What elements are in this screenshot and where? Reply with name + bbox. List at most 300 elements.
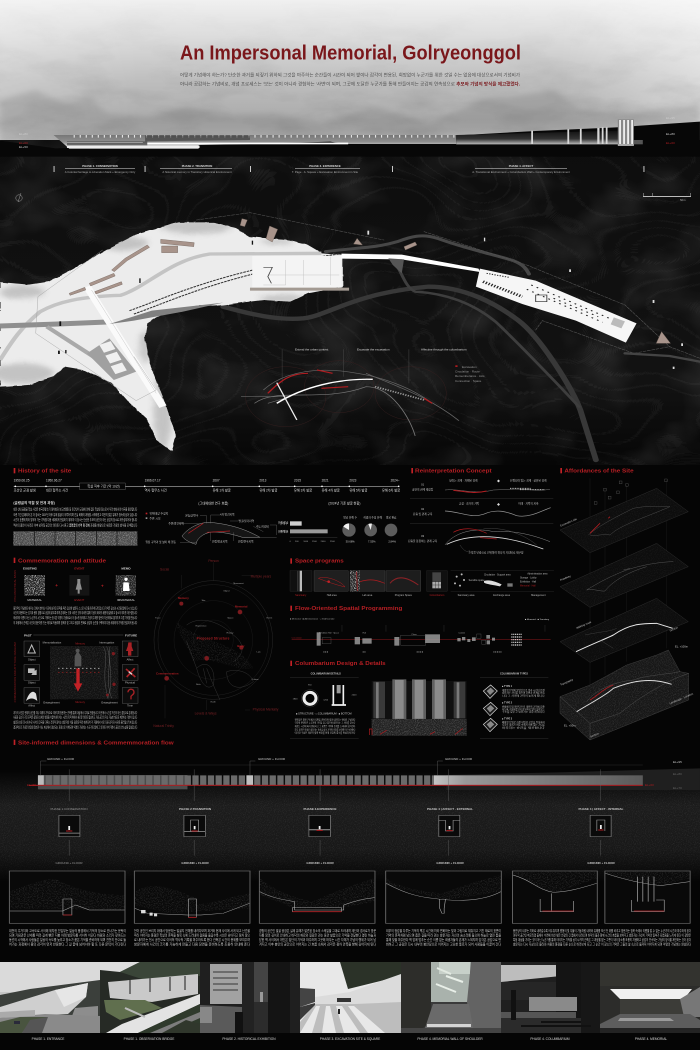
flow strip: ■ ■ ■	[323, 650, 329, 653]
flow strip: ■ Memorial · ■ Administration · □ Void/Corridor	[290, 618, 335, 621]
radial memory diagram: Social	[160, 567, 169, 571]
section labels: PHASE 4 | AFFECT - INTERNAL	[579, 807, 624, 811]
phase descriptions	[9, 928, 692, 946]
phase labels: A Colonial heritage to Liberation Mark + Emergency Only	[65, 170, 136, 174]
longitudinal section building in terrain	[0, 119, 700, 157]
columbarium details: 1200	[323, 700, 329, 702]
phase descriptions: 대전의 주거지와 고속도로 사이에 위치한 진입부는 일상의 풍경에서 기억의 장소로 건너가는 문턱이	[9, 928, 126, 933]
existing / event / memo: EVENT	[74, 598, 84, 602]
radial memory diagram: Person	[208, 559, 219, 563]
flow strip: Column	[458, 633, 465, 635]
radial memory diagram: Multiple years	[251, 574, 272, 578]
axonometric layers	[559, 478, 694, 740]
concept diagrams: 고정 · 과거의 기억	[459, 502, 480, 506]
excavation stats chart	[280, 500, 397, 543]
section labels: EL+60	[27, 783, 36, 787]
radial memory diagram: Memory	[178, 596, 189, 600]
photo captions: PHASE 4. MEMORIAL WALL OF SHOULDER	[417, 1037, 483, 1041]
heading: history: History of the site	[18, 469, 71, 475]
timeline: 2013	[259, 478, 267, 482]
heading: flow-oriented: Flow-Oriented Spatial Programming	[295, 606, 403, 612]
phase labels: A historical memory in Transitory Historical Environment	[162, 170, 232, 174]
timeline: 유해 1차 발굴	[213, 488, 231, 493]
program thumbnails: Administration area	[527, 572, 548, 575]
existing / event / memo: EXISTING	[23, 567, 38, 571]
radial memory diagram: Space	[227, 617, 234, 619]
intro text: 아니라 공감하는 기념비로, 개념 프로세스는 '보는' 것이 아니라 경험하는 '사변'이 되며, 그곳에 도달한 누군가를 통해 만들어지는 공감의 연속성으로 추모와 기념의 방식을 제고했었다.	[180, 80, 520, 88]
concept diagrams: 01	[421, 483, 425, 487]
side label: PHILOSOPHICAL BASIS	[13, 570, 17, 602]
past future diagram: Object	[28, 681, 36, 685]
past future diagram: FUTURE	[125, 633, 137, 637]
site timeline diagram: 발굴/불가지역	[239, 519, 255, 523]
program thumbnails	[290, 571, 554, 597]
dashed paths to memorial	[129, 254, 341, 314]
heading: affordances: Affordances of the Site	[564, 469, 634, 475]
phase descriptions: 통해 빛을 마주한다 벽 앞에 멈추는 순간 이름 없는 희생자들의 존재가 느껴지며 감각은 공감으로 변	[386, 937, 501, 942]
concept diagrams: 공간의 관계 재정립	[412, 487, 434, 491]
wedge to building	[109, 303, 223, 324]
program thumbnails: Columbarium	[430, 594, 444, 597]
timeline: 대전 형무소 사건	[46, 488, 68, 493]
dark roads	[196, 213, 700, 460]
existing / event / memo: MEMO	[121, 567, 131, 571]
concept diagrams: 보이는 경계 · 차폐된 경계	[449, 479, 478, 483]
phase descriptions: 겨지고 이후 봉안의 공간으로 이어지는 긴 흐름 속에서 감각은 점차 안쪽을 향해 깊어지게 된다	[259, 942, 377, 946]
axonometric layers: Roadway	[559, 574, 572, 582]
photo captions: PHASE 2. HISTORICAL EXHIBITION	[222, 1037, 276, 1041]
long section and phase boxes	[9, 761, 700, 923]
concept diagrams: 미래 · 기억의 지속	[518, 502, 539, 506]
diagram captions: Rememberance · Axis	[455, 374, 485, 378]
diagram captions: Extend the urban context	[295, 348, 329, 352]
section labels: GROUND + FLOOR	[436, 861, 464, 865]
radial memory diagram: Object	[223, 590, 230, 593]
columbarium details: 각각의 봉안단은 누군가의 기억을 담고 있으며 방문자는 그 사이를 걷는다	[295, 721, 355, 725]
site timeline diagram: (그대에대한 연구 흐름)	[198, 501, 228, 506]
program thumbnails: Sanctuary	[295, 594, 307, 597]
flow section: grain ground	[0, 778, 700, 876]
radial memory diagram: Memorial	[235, 604, 248, 608]
excavation stats chart: (2024년 기준 발굴 현황)	[328, 500, 360, 505]
columbarium details: 하도록 구성하였으며 상부에서 빛이 들어오는	[502, 707, 545, 711]
photo captions: PHASE 1. OBSERVATION BRIDGE	[124, 1037, 174, 1041]
radial memory diagram: Trace	[155, 616, 161, 619]
program thumbnails: Lab area	[362, 594, 373, 597]
timeline	[14, 478, 290, 493]
timeline: 조선인 군경 발생	[14, 488, 36, 493]
flow strip: Plaza	[412, 634, 418, 636]
flow strip: ■ ■	[363, 650, 366, 653]
attitude text: 사건의 재현보다는 감각과 몸의 경험으로 공감에 닿도록 하며 존재하는 것과 사라진 것의 대비를 통해 기념의 태도를 새롭게 설정하고 장소의 의미를 재구성합니다	[13, 610, 137, 615]
columbarium details: 개방형 단위의 봉안단으로 빛과 시선이 연결	[502, 688, 545, 692]
columbarium details: ■ TYPE 3	[502, 717, 513, 720]
radial memory diagram: Levels & Ways	[195, 711, 217, 715]
columbarium details	[290, 673, 548, 739]
heading: site-informed: Site-informed dimensions & Commemmoration flow	[18, 740, 174, 746]
parking area	[87, 338, 136, 380]
phase descriptions: 자를 땅의 깊이로 안내하고 바닥의 재료와 질감은 걷는 동안 발끝으로 기억을 전달한다 열린 하늘과	[259, 932, 376, 938]
columbarium details: 구조를 갖추고 방문자는 멈추게 됩니다	[502, 710, 546, 714]
elevation labels: EL+80	[19, 132, 28, 136]
photo: memorial wall of shoulder	[401, 962, 501, 1033]
bridge strip	[341, 254, 480, 272]
columbarium details: 방문자는 사이를 걸으며 주변과 관계를 만듭	[502, 691, 546, 695]
site plan	[0, 213, 700, 460]
phase descriptions: 닫힌 벽 사이에서 개인은 집단의 기억과 마주하며 그곳에 머무는 시간 자체가 기념의 행위가 되어 남	[259, 937, 376, 942]
program thumbnails: Circulation · Support area	[484, 574, 511, 577]
photo captions: PHASE 4. MEMORIAL	[635, 1037, 667, 1041]
site timeline diagram: 4차 발견지역	[220, 513, 235, 517]
timeline: 1950.06.27	[46, 478, 62, 482]
columbarium details: 이러한 구성은 재료와 빛의 변화를 통해 공감의 장소를 형성하게 된다	[295, 731, 355, 735]
photo captions: PHASE 3. EXCAVATION SITE & SQUARE	[320, 1037, 380, 1041]
past future diagram: Memory	[75, 700, 86, 704]
phase descriptions: 로 내려가는 전시 공간으로 이어져 역사적 기록을 마주하도록 한다 건축은 시간의 층위를 보여주며	[134, 937, 250, 942]
radial memory diagram: History	[227, 631, 234, 634]
excavation stats chart: 희생자 추정 유해	[363, 515, 382, 519]
radial memory diagram: Earth	[211, 700, 217, 703]
past future diagram: Physical	[125, 681, 135, 685]
program thumbnails: Exchange area	[493, 594, 511, 597]
existing / event / memo	[23, 567, 136, 602]
axonometric layers: Landscape · Location	[669, 691, 694, 705]
phase descriptions: 어가는 과정에서 몸의 감각이 먼저 반응한다 그 길 끝에 넘어서야 할 또 다른 문턱이 기다린다	[9, 942, 127, 946]
columbarium details: 하부 공간은 아래로 내려가는 동선을 따라 기억의 층위를 순차적으로 보여준다	[295, 727, 355, 731]
past future diagram: Entanglement	[101, 701, 118, 705]
diagram text: 발굴과 보존 전시와 추모 사이의 간극을 다루는 건축적 장치는 방문자의 이동 경로를 따라 배치되어 각 지점에서 서로 다른 감각과 사유를 불러일으키게 됩니다	[13, 719, 137, 724]
site timeline diagram: 유해 발굴	[278, 521, 289, 525]
phase labels	[54, 164, 644, 174]
diagram captions: Excavation	[462, 365, 477, 369]
concept diagrams: ◆	[497, 502, 500, 506]
past future diagram: Memorialization	[43, 641, 62, 645]
section labels: GROUND + FLOOR	[587, 861, 615, 865]
photo: observation bridge	[100, 962, 200, 1033]
photo captions: PHASE 1. ENTRANCE	[32, 1037, 64, 1041]
phase labels: PHASE 4. AFFECT	[509, 164, 534, 168]
site sections	[9, 871, 690, 923]
program thumbnails: Program Space	[395, 594, 413, 597]
columbarium details: 반폐쇄 단위 봉안단으로 개인의 기억에 집중	[502, 704, 546, 708]
history text: 역사의 증인이 사라진 이후 남겨질 공간의 의미를 다시 묻고 골령골의 기억 및 전개 과정을 바탕으로 새로운 기념의 방식을 모색합니다	[13, 522, 137, 527]
past future diagram: Entanglement	[43, 701, 60, 705]
radial memory diagram: Natural Trinity	[153, 724, 174, 728]
columbarium details: 마주하는 순간을 제공합니다	[502, 725, 546, 729]
columbarium details: ■ STRUCTURE · □ COLUMBARIUM · ■ BOTTOM	[296, 712, 352, 715]
radial memory diagram: Relic	[196, 684, 202, 686]
phase labels: PHASE 1. CONSERVATION	[82, 164, 118, 168]
site timeline diagram: 유해 발굴	[278, 530, 289, 534]
past future diagram: COMMEMORATION AND ATTITUDE DIAGRAM	[13, 642, 17, 702]
history text: (골령골의 역할 및 전개 과정)	[13, 500, 55, 505]
flow strip: Exhibition Hall · Space	[319, 632, 340, 635]
elevation labels: EL+95	[666, 116, 675, 120]
intro text	[180, 72, 520, 88]
radial memory diagram: Body	[237, 644, 245, 648]
concept diagrams: 단절되어 있는 경계 · 공유된 경계	[510, 479, 547, 483]
existing / event / memo: IMMATERIAL	[117, 598, 135, 602]
columbarium details: 2400	[352, 695, 357, 697]
existing / event / memo: +	[101, 584, 104, 589]
program thumbnails: Exhibition · Hall	[520, 580, 537, 583]
phase descriptions: 방문자에게 사건의 크기를 가늠하게 만들고 다음 장면을 준비하도록 조용히 안내해 준다	[134, 942, 251, 946]
timeline: 역사 형무소 사건	[145, 488, 167, 493]
columbarium details: 950	[308, 685, 312, 687]
radial memory diagram: Law	[257, 651, 261, 653]
columbarium wedge	[476, 269, 637, 343]
concept diagrams: 단층 및 관계 구축	[413, 512, 433, 516]
elevation labels: EL+60	[666, 141, 675, 145]
site timeline diagram: 유해매장 추정지	[149, 512, 169, 516]
section labels: PHASE 2.TRANSITION	[179, 807, 211, 811]
history text	[13, 500, 137, 527]
timeline continued: 유해 5차 발굴	[349, 488, 367, 493]
columbarium details: 봉안당은 원형 구조체가 지면을 관통하여 빛이 내려오는 형태로 구성된다	[295, 717, 355, 721]
columbarium details: 재료는 시간에 따라 변화하고 그 표면은 기억의 층위를 드러내며 남겨진다	[295, 724, 355, 728]
timeline continued: 2024~	[391, 478, 400, 482]
photo: entrance	[0, 962, 100, 1033]
phase labels: T. Page · A. Square + Excavation Environment in Site	[292, 170, 359, 174]
timeline continued: 유해 3차 발굴	[294, 488, 312, 493]
brown pavilions	[69, 219, 670, 343]
flow strip: ■ ■ ■ ■ ■	[493, 650, 502, 653]
phase labels: PHASE 3. EXPERIENCE	[309, 164, 341, 168]
site timeline diagram: 인접/연구지역	[238, 539, 254, 543]
diagram text: 결과적으로 기념은 완결된 형태가 아닌 계속해서 갱신되는 과정으로 이해되며 익명의 기념비는 누군가를 통해 그 의미를 이어가면서 공감의 연속성을 형성합니다	[13, 725, 137, 730]
excavation stats chart: 2.84%	[388, 539, 397, 543]
radial memory diagram: Culture	[252, 678, 259, 681]
site timeline diagram	[145, 501, 289, 544]
memorial court	[250, 256, 349, 291]
section labels: EL+80	[673, 772, 682, 776]
diagram text: 과거의 사건은 현재의 공간을 지나 미래의 기억으로 이어지며 방문자는 건축을 통해 대상에서 주체로 전환됩니다 이곳에서 시간은 직선이 아닌 겹침으로 존재합니다	[13, 710, 137, 715]
columbarium details: 1800	[293, 698, 298, 700]
timeline continued: 유해 4차 발굴	[322, 488, 340, 493]
excavation stats chart: 1000	[303, 541, 309, 543]
small section frames	[59, 815, 611, 837]
section labels: EL+70	[673, 786, 682, 790]
phase labels: PHASE 2. TRANSITION	[182, 164, 212, 168]
existing / event / memo: MATERIAL	[27, 598, 42, 602]
timeline continued: 2021	[322, 478, 329, 482]
concept diagrams: 03	[421, 534, 425, 538]
heading: reinterpretation: Reinterpretation Concept	[415, 469, 492, 475]
radial memory diagram: Monument	[233, 582, 244, 585]
radial memory diagram: Proposed Structure	[197, 636, 230, 640]
scale bar	[643, 193, 691, 202]
diagram captions: Connection · Space	[455, 379, 482, 383]
heading: commemoration: Commemoration and attitude	[18, 558, 106, 564]
site timeline diagram: 운동장/연구	[185, 513, 199, 517]
excavation stats chart: 2500	[330, 541, 336, 543]
scale bar: 50m	[680, 198, 686, 202]
concept diagrams: ◆	[497, 479, 500, 483]
program thumbnails: Sensible space	[469, 580, 485, 582]
existing / event / memo: EVENT	[74, 567, 84, 571]
flow strip: ■ ■ ■ ■	[417, 650, 424, 653]
photo: columbarium	[501, 962, 600, 1033]
past future diagram: Affect	[28, 703, 35, 707]
axonometric layers: Section	[669, 625, 679, 633]
radial memory diagram	[153, 559, 279, 728]
past future diagram: PAST	[24, 633, 32, 637]
section labels: GROUND + FLOOR	[445, 757, 473, 761]
section labels: GROUND + FLOOR	[306, 861, 334, 865]
flow strip: ■ Memorial · ■ Transitory	[525, 618, 550, 621]
site timeline diagram: 주변/발견지역	[168, 521, 184, 525]
axonometric layers: Walking route	[575, 620, 592, 630]
attitude text: 물리적인 기념비를 세우는 것에서 벗어나 이곳에 남겨진 흔적을 따라 걸으며 방문자 스스로 사건을 마주하도록 합니다 기억은 장소와 시간을 통해 다시 쓰입니다	[13, 605, 137, 610]
site timeline diagram: 추도/기념비	[256, 524, 270, 528]
panel: left column	[13, 468, 290, 746]
phase descriptions: 경험의 공간인 발굴 광장은 실제 유해가 발견된 장소의 스케일을 그대로 드러내며 계단과 경사로가 방문	[259, 928, 376, 933]
elevation labels: EL+60	[19, 141, 28, 145]
program thumbnails: Sanctuary area	[458, 594, 475, 597]
radial memory diagram: Experience	[196, 625, 207, 628]
site timeline diagram: 인접/발굴지역	[212, 539, 228, 543]
timeline: 1950.06.25	[14, 478, 30, 482]
diagram: site organisation	[241, 349, 459, 436]
radial memory diagram: Physical Mentally	[253, 708, 279, 712]
radial memory diagram: Event	[267, 616, 273, 619]
radial memory diagram: Site	[202, 599, 206, 602]
timeline continued: 유해 6차 발굴	[382, 488, 400, 493]
diagram captions: Affective through the columbarium	[421, 348, 467, 352]
excavation stats chart: 유해 수	[280, 521, 289, 525]
attitude text	[13, 605, 137, 625]
section labels: EL+95	[673, 760, 682, 764]
photo: memorial	[600, 962, 700, 1033]
plaza roads	[0, 250, 321, 407]
existing / event / memo: +	[55, 583, 58, 588]
radial memory diagram: Commemoration	[156, 671, 179, 675]
section labels: EL+60	[645, 783, 654, 787]
phase descriptions: 따라 이어지는 풍경은 학살의 흔적을 침묵 속에 드러내며 걸음을 옮길수록 시선은 낮아지고 점차 땅으	[134, 932, 250, 938]
past future diagram	[13, 633, 138, 707]
columbarium details: COLUMBARIUM DETAILS	[311, 673, 341, 676]
people marks	[58, 241, 253, 354]
axonometric layers: Excavation site	[559, 517, 578, 528]
section labels: GROUND + FLOOR	[258, 757, 286, 761]
section labels: PHASE 3.EXPERIENCE	[303, 807, 337, 811]
phase descriptions: 화하고 그 공감은 다시 내부의 봉안당으로 이어지는 고요한 통로가 되어 사람들을 이끌어 간다	[386, 942, 502, 946]
phase descriptions: 전이 공간인 브리지 위에서 방문자는 발굴지 전체를 내려다보며 과거와 현재 사이에 서게 되고 난간을	[134, 928, 250, 933]
excavation stats chart: 7.53%	[368, 539, 376, 543]
excavation stats chart: 30.68%	[346, 539, 355, 543]
excavation stats chart: 유해 수	[280, 529, 289, 533]
timeline continued: 2015	[294, 478, 301, 482]
site timeline diagram: 주변 시설	[149, 516, 161, 520]
past future diagram: Time	[127, 703, 133, 707]
columbarium details: ■ TYPE 2	[502, 702, 513, 705]
past future diagram: Object	[28, 658, 36, 662]
attitude text: 희생자의 이름이 아닌 누군가의 시간으로 기억하는 방식은 익명의 기념비로서 이 장소를 정의하고 기념의 주체를 방문자 자신에게로 옮기며 또 다른 기억을 만듭니다	[13, 615, 137, 620]
columbarium details: 니다 그 사이에 기억이 놓이게 됩니다	[502, 693, 546, 697]
concept diagrams	[408, 479, 553, 555]
heading: columbarium: Columbarium Design & Details	[295, 661, 386, 667]
site plan background with contours	[0, 140, 700, 465]
title: An Impersonal Memorial, Golryeonggol	[180, 42, 521, 64]
program thumbnails: Management	[531, 594, 546, 597]
section labels: PHASE 4 | AFFECT - EXTERNAL	[427, 807, 473, 811]
excavation stats chart: 발굴 유해 수	[343, 515, 358, 519]
panel: center and right column	[280, 468, 694, 740]
columbarium details: ■ TYPE 1	[502, 685, 513, 688]
timeline continued: 2023	[349, 478, 357, 482]
excavation stats chart: 2000	[321, 541, 326, 543]
diagram captions: Excavate the excavation	[357, 348, 390, 352]
site timeline diagram: 행정 구역과 및 넓이 매 행동	[145, 540, 176, 544]
program thumbnails: Hall area	[327, 594, 337, 597]
elevation labels	[19, 116, 675, 149]
columbarium details: 지하로 내려가 어둠 속에서 이름 없는 기념을	[502, 723, 546, 727]
diagram captions: Circulation · Route	[455, 370, 480, 374]
flow strip: Hall	[363, 633, 367, 635]
intro text: 어떻게 기념해야 하는가? 단순한 과거를 되짚기 위하되 그것을 마주하는 순간들이 시간이 되어 쌓이나 감각이 변용된, 희망없이 누군가를 위한 것일 수는 없음에 대상으로서의 기념비가	[180, 72, 520, 78]
history text: 대전 산내 골령골 학살 사건은 한국전쟁 초기 정치범과 보도연맹원 등 민간인이 군경에 의해 집단 학살된 장소로서 우리 현대사의 비극을 증언합니다	[13, 506, 137, 511]
heading: space programs: Space programs	[295, 559, 344, 565]
timeline: 2007	[213, 478, 220, 482]
header: foggy sky with forest	[0, 0, 700, 150]
history text: 시간이 흐름에 따라 잊혀져 가는 기억을 다음 세대에게 전달하기 위하여 이 장소는 단순한 추모의 공간이 아닌 공감의 장소로 재구성되어야 합니다	[13, 517, 137, 522]
phase descriptions: 기억의 흔적처럼 남으며 좁은 길을 따라 걷는 방문자는 자신의 숨소리를 들으며 하늘로 열린 틈을	[386, 932, 501, 938]
photo: excavation site and square	[300, 962, 401, 1033]
photo captions	[32, 1037, 667, 1041]
section labels: GROUND + FLOOR	[47, 757, 75, 761]
phase descriptions: 외부의 정감을 다루는 기억의 벽은 시간에 따라 변화하는 빛과 그림자로 채워지고 거친 재료의 표면이	[386, 928, 501, 933]
program thumbnails: Storage · Lobby	[520, 576, 537, 579]
photo: historical exhibition	[200, 962, 300, 1033]
diagram captions	[295, 348, 485, 383]
past future diagram: Memory	[75, 641, 86, 645]
concept diagrams: 흔적을 단층으로 전유하여 하나의 기념비로 재구성	[468, 551, 524, 555]
axonometric layers: Topography	[559, 677, 574, 687]
timeline: 1966.07.17	[145, 478, 161, 482]
concept diagrams: 02	[421, 507, 425, 511]
section labels: GROUND + FLOOR	[55, 861, 83, 865]
history text: 오랜 기간 은폐되어 온 이 장소는 2007년 이후 유해 발굴이 이루어지며 진실 화해의 과정을 시작하였고 여전히 많은 유해가 땅속에 남아 있습니다	[13, 512, 137, 517]
elevation labels: EL+50	[19, 145, 28, 149]
section labels: GROUND + FLOOR	[181, 861, 209, 865]
program thumbnails: Memorial · Hall	[520, 585, 536, 588]
columbarium details: COLUMBARIUM TYPES	[500, 673, 528, 676]
timeline: 유해 2차 발굴	[259, 488, 277, 493]
phase descriptions: 되며 기념관은 산세를 따라 길게 뻗은 지붕 아래 방문자를 서서히 이끈다 바람과 소리가 잦아드는	[9, 932, 126, 938]
flow strip: Circulation	[292, 636, 303, 639]
phase labels: A. Transitional Environment + Columbarium Wall + Contemporary Environment	[472, 170, 570, 174]
excavation stats chart: 500	[295, 541, 299, 543]
diagram text: 사물과 장소가 가진 흔적은 감정과 신체의 반응을 이끌어내며 이는 시간의 축적 위에서 새로운 의미를 형성하고 기념 공간의 지속 가능한 태도를 제안하는 기반이 됩니다	[13, 714, 137, 719]
past future diagram: Interrogation	[99, 641, 115, 645]
axonometric layers: Section	[589, 731, 600, 739]
photo captions: PHASE 4. COLUMBARIUM	[530, 1037, 570, 1041]
axonometric layers: EL. +100m	[675, 645, 689, 649]
compass	[16, 193, 22, 202]
excavation stats chart: 1500	[312, 541, 318, 543]
axonometric layers: EL. +50m	[564, 724, 576, 728]
elevation labels: EL+80	[666, 132, 675, 136]
history images	[13, 531, 137, 546]
section labels	[27, 757, 682, 865]
phase descriptions: 동선의 시작에서 사람들은 일상의 속도를 늦추고 장소가 품은 기억을 준비하게 되며 천천히 안으로 들	[9, 937, 126, 942]
white excavation landscape	[0, 219, 343, 452]
past future diagram: Affect	[127, 658, 134, 662]
concept diagrams: 단층을 통합하는 관계 구축	[408, 539, 438, 543]
attitude text: 이 과정에서 건축은 사건과 방문자를 잇는 매개로 작동하며 침묵과 빛 그리고 물질의 변화로 공감의 순간을 구축하여 다음 세대에게 기억을 전달하게 됩니다	[13, 620, 137, 625]
timeline continued	[280, 478, 400, 493]
flow strip	[290, 618, 551, 653]
